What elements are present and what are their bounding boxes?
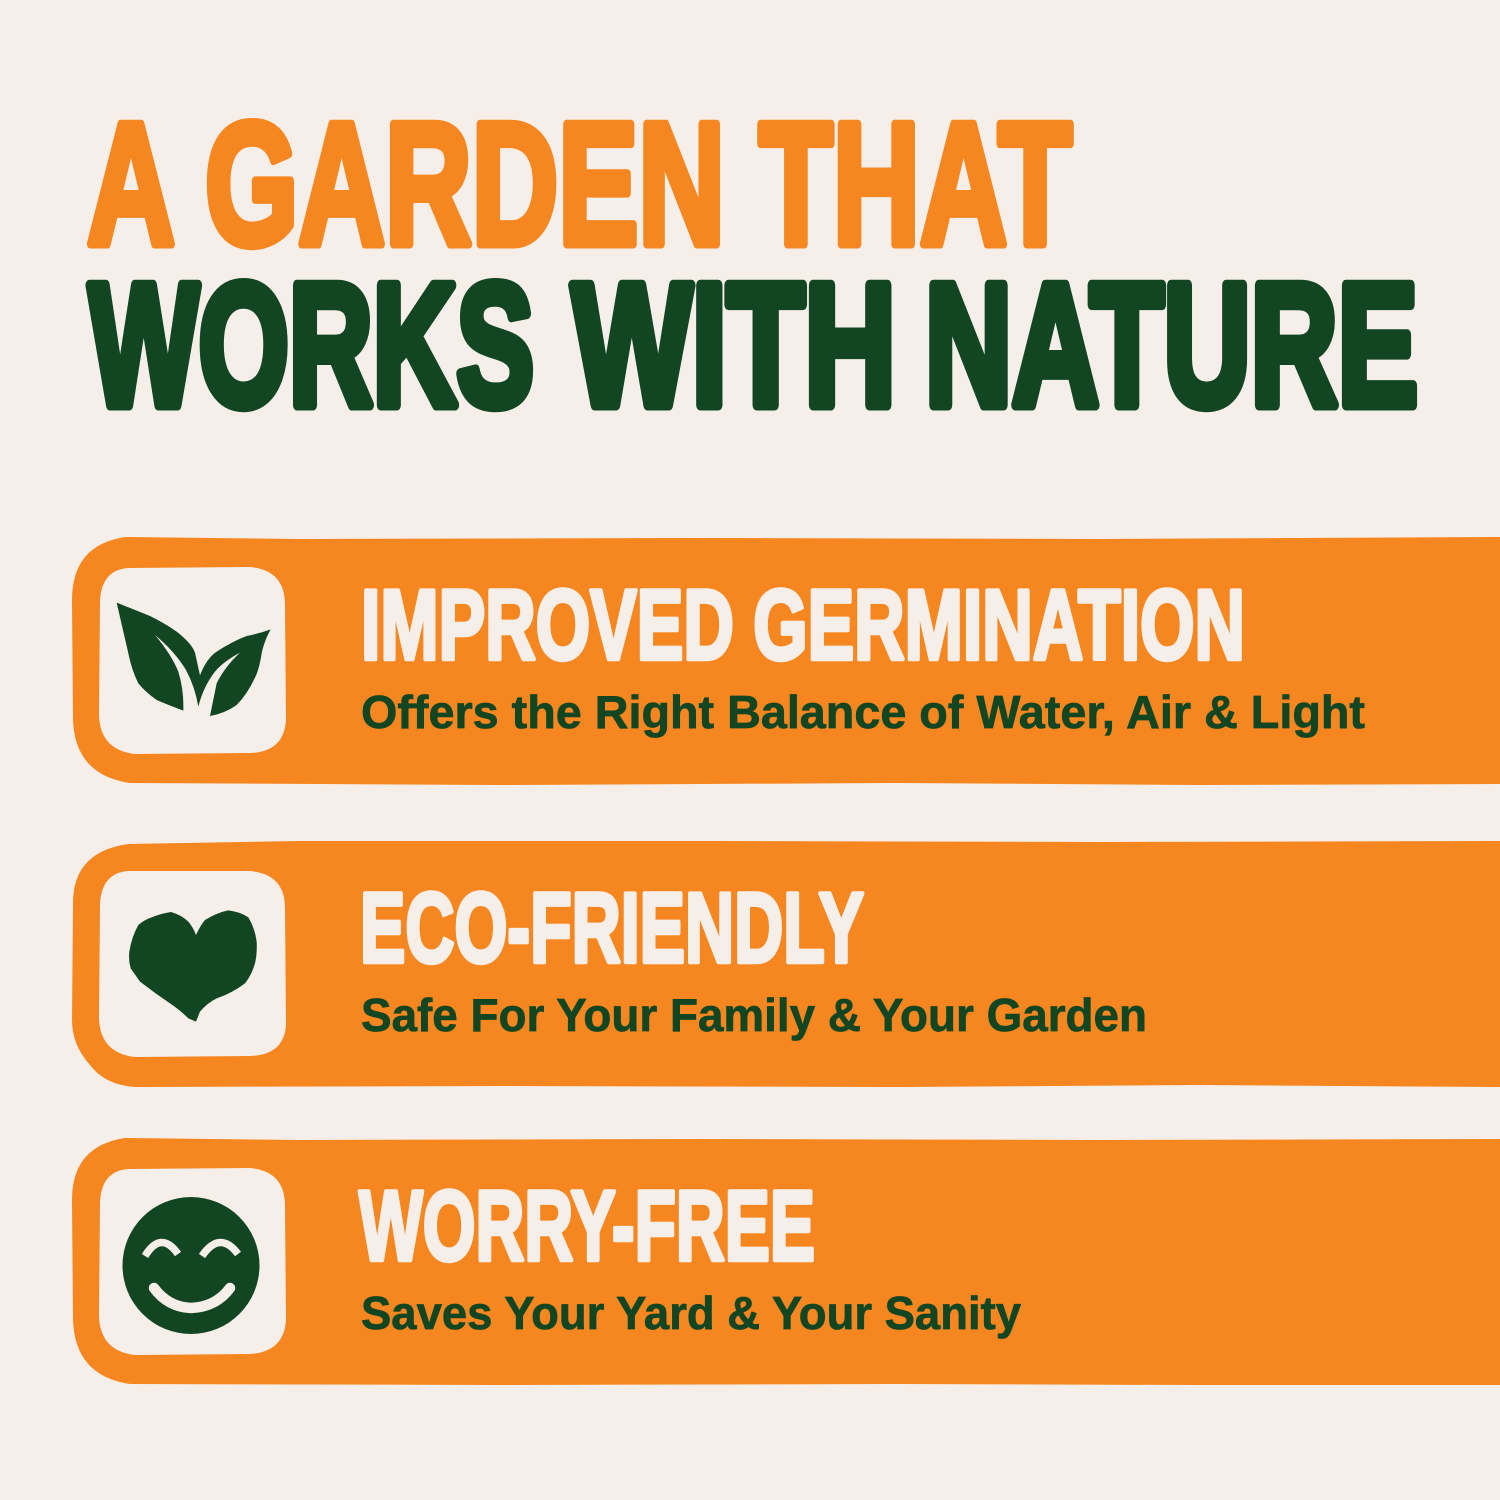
panel background: [72, 537, 1500, 785]
panel background: [72, 841, 1500, 1087]
heading: ECO-FRIENDLY: [360, 872, 864, 983]
icon: smiley: [99, 1168, 286, 1355]
icon: leaves: [99, 567, 286, 754]
title line 1: A: [87, 86, 175, 281]
panel: improved germination: [72, 537, 1500, 785]
panel background: [72, 1138, 1500, 1385]
title line 1: THAT: [759, 86, 1072, 281]
icon: heart: [99, 871, 286, 1057]
heading: WORRY-FREE: [359, 1170, 815, 1281]
panel: eco-friendly: [72, 841, 1500, 1087]
title: [87, 86, 1418, 442]
subheading: Saves Your Yard & Your Sanity: [361, 1287, 1021, 1339]
subheading: Offers the Right Balance of Water, Air & Light: [361, 686, 1365, 738]
title line 2: [89, 247, 1418, 442]
title line 1: GARDEN: [205, 86, 725, 281]
title line 2: WITH: [572, 247, 896, 442]
panel: worry-free: [72, 1138, 1500, 1385]
subheading: Safe For Your Family & Your Garden: [361, 989, 1147, 1041]
title line 2: WORKS: [89, 247, 534, 442]
